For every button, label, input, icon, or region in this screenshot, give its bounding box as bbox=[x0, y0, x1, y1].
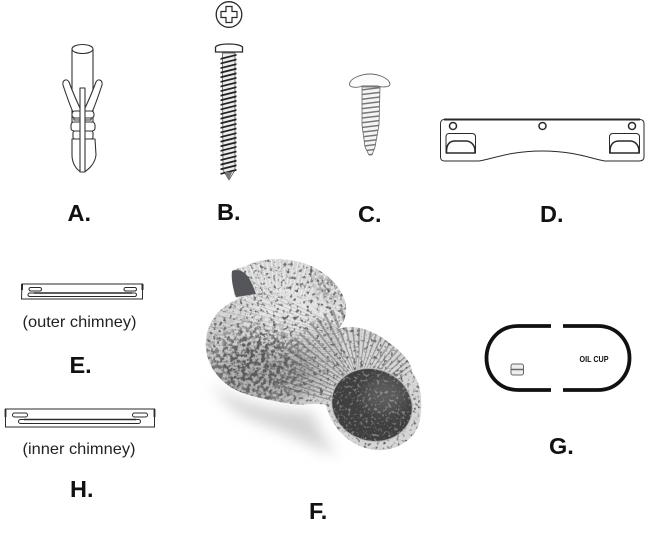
caption: outer chimney: (outer chimney) bbox=[22, 314, 136, 331]
icon: wall anchor bbox=[63, 44, 102, 172]
part F label: F. bbox=[309, 498, 327, 524]
part C label: C. bbox=[358, 201, 382, 227]
part C: short screw bbox=[349, 74, 390, 160]
duct shadow bbox=[212, 380, 338, 456]
icon: outer bracket bbox=[22, 284, 142, 299]
duct body bbox=[200, 255, 425, 455]
part H: inner chimney bracket bbox=[6, 409, 154, 458]
part D: mounting bracket bbox=[440, 120, 644, 161]
part H label: H. bbox=[70, 476, 94, 502]
part A: wall anchor bbox=[63, 44, 102, 172]
part B: long screw bbox=[216, 2, 242, 180]
oil cup window bbox=[511, 364, 524, 375]
icon: screw side view bbox=[216, 44, 242, 180]
part G: oil cup bbox=[486, 326, 630, 390]
part A label: A. bbox=[68, 200, 91, 226]
icon: oil cup outline bbox=[486, 326, 630, 390]
part B label: B. bbox=[217, 199, 240, 225]
duct far opening bbox=[232, 270, 256, 297]
part D label: D. bbox=[540, 201, 564, 227]
icon: bracket plate bbox=[440, 120, 644, 161]
icon: inner bracket bbox=[6, 409, 154, 427]
part G label: G. bbox=[549, 433, 574, 459]
part E: outer chimney bracket bbox=[22, 284, 142, 331]
icon: screw head top view bbox=[216, 2, 242, 27]
oil cup text: OIL CUP bbox=[580, 354, 609, 364]
part E label: E. bbox=[70, 352, 92, 378]
icon: short screw bbox=[349, 74, 390, 160]
part F: flexible aluminium duct bbox=[200, 255, 425, 456]
duct near opening bbox=[331, 368, 413, 442]
caption: inner chimney: (inner chimney) bbox=[22, 441, 136, 458]
